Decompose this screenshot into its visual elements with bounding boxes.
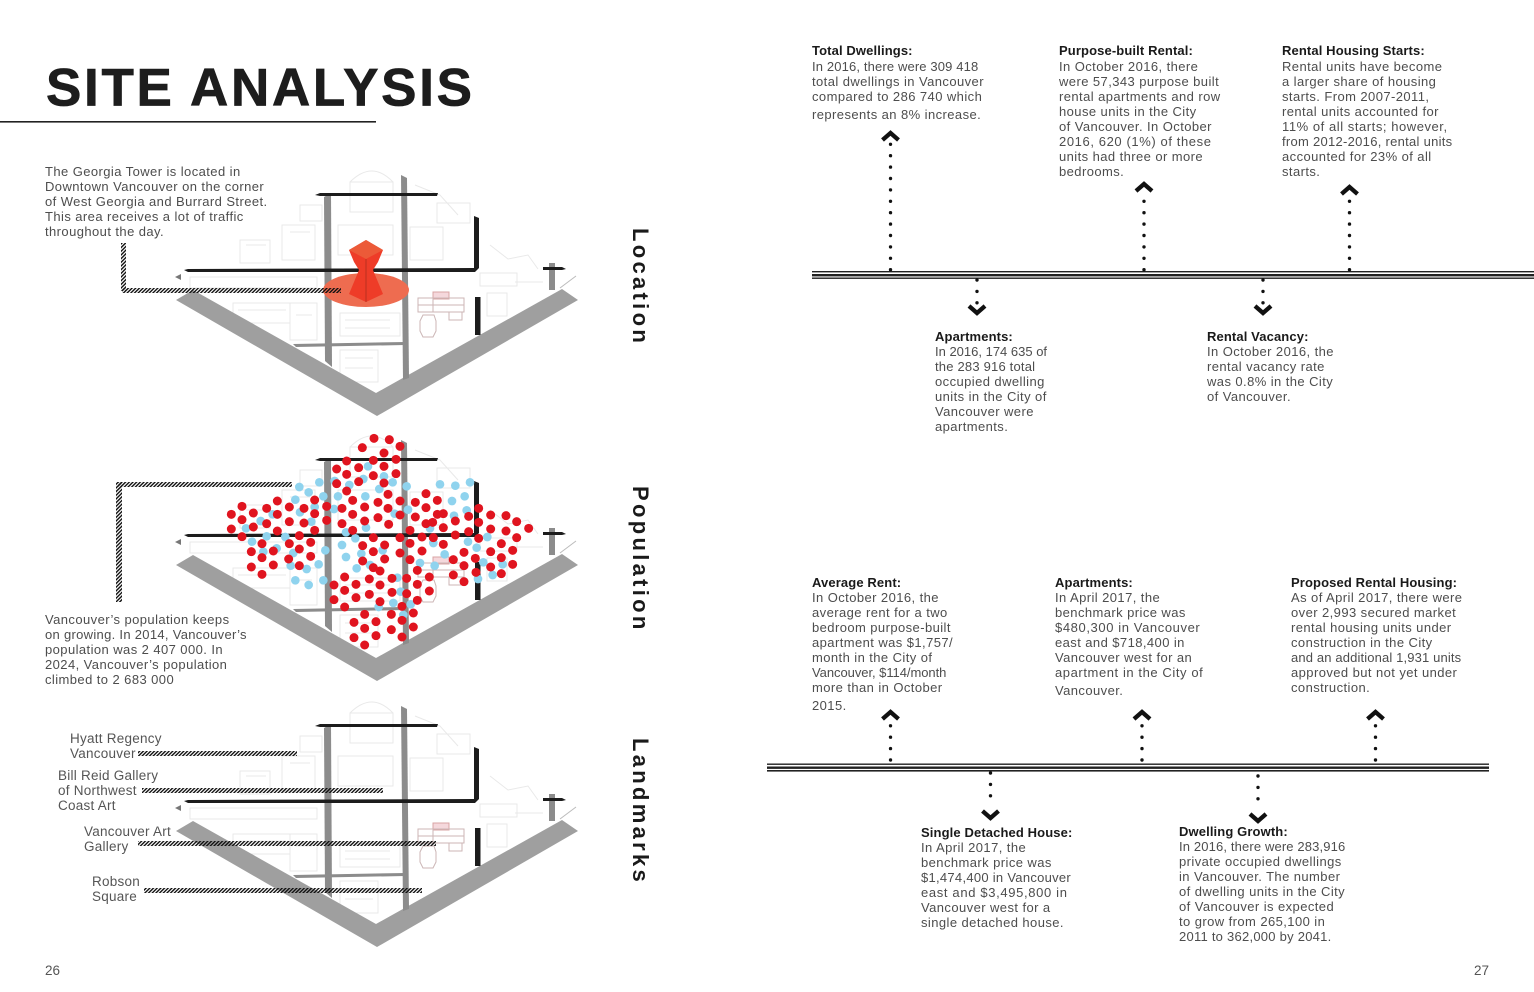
landmark label: Vancouver Art Gallery: Gallery — [84, 839, 129, 854]
text block: Proposed Rental Housing: rental housing units under — [1291, 620, 1452, 635]
text block: Proposed Rental Housing: and an additional 1,931 units — [1291, 650, 1462, 665]
text block: Purpose-built Rental: Purpose-built Rental: — [1059, 43, 1193, 58]
text block: Rental Housing Starts: a larger share of housing — [1282, 74, 1436, 89]
arrow down: Apartments — [969, 280, 985, 313]
arrow down: Single Detached House — [982, 773, 998, 818]
text block: Single Detached House: single detached house. — [921, 915, 1064, 930]
landmark label: Hyatt Regency Vancouver: Vancouver — [70, 746, 136, 761]
arrow up: Purpose-built Rental — [1136, 184, 1152, 270]
text block: Dwelling Growth: in Vancouver. The number — [1179, 869, 1341, 884]
title: SITE ANALYSIS — [46, 58, 472, 118]
landmark pointer lines — [138, 751, 436, 893]
text block: Rental Vacancy: Rental Vacancy: — [1207, 329, 1309, 344]
landmark label: Bill Reid Gallery: Bill Reid Gallery — [58, 768, 158, 783]
landmark label: Bill Reid Gallery: Coast Art — [58, 798, 116, 813]
text block: location description: throughout the day. — [45, 224, 164, 239]
section label: Landmarks: Landmarks — [628, 738, 653, 885]
text block: location description: Downtown Vancouver on the corner — [45, 179, 264, 194]
timeline rail — [812, 271, 1534, 279]
text block: Single Detached House: Vancouver west for a — [921, 900, 1051, 915]
text block: Dwelling Growth: of Vancouver is expected — [1179, 899, 1334, 914]
landmark label: Robson Square: Robson — [92, 874, 140, 889]
map: location — [121, 171, 578, 416]
map: landmarks — [138, 702, 578, 947]
text block: Apartments 2016: occupied dwelling — [935, 374, 1045, 389]
text block: Average Rent: In October 2016, the — [812, 590, 939, 605]
text block: Dwelling Growth: Dwelling Growth: — [1179, 824, 1288, 839]
text block: Average Rent: bedroom purpose-built — [812, 620, 951, 635]
text block: Total Dwellings: compared to 286 740 which — [812, 89, 982, 104]
text block: Single Detached House: east and $3,495,800 in — [921, 885, 1068, 900]
icon: tower marker — [323, 240, 409, 307]
text block: Apartments 2016: Apartments: — [935, 329, 1013, 344]
text block: location description: The Georgia Tower is located in — [45, 164, 241, 179]
text block: Proposed Rental Housing: approved but not yet under — [1291, 665, 1458, 680]
text block: Average Rent: average rent for a two — [812, 605, 948, 620]
text block: Dwelling Growth: In 2016, there were 283,916 — [1179, 839, 1345, 854]
text block: Dwelling Growth: private occupied dwellings — [1179, 854, 1342, 869]
callout leader: hatch line — [116, 482, 292, 602]
text block: Proposed Rental Housing: construction. — [1291, 680, 1370, 695]
text block: Apartments 2017: Vancouver west for an — [1055, 650, 1192, 665]
arrow up: Apartments — [1134, 712, 1150, 760]
text block: Proposed Rental Housing: construction in the City — [1291, 635, 1433, 650]
text block: Rental Vacancy: In October 2016, the — [1207, 344, 1334, 359]
text block: Purpose-built Rental: house units in the City — [1059, 104, 1197, 119]
text block: Rental Vacancy: was 0.8% in the City — [1206, 374, 1333, 389]
text block: population description: climbed to 2 683 000 — [45, 672, 174, 687]
text block: population description: population was 2 407 000. In — [45, 642, 223, 657]
page number 27: 27 — [1474, 963, 1489, 978]
callout leader: hatch line — [121, 243, 341, 293]
text block: Total Dwellings: represents an 8% increase. — [812, 107, 981, 122]
arrow down: Rental Vacancy — [1255, 280, 1271, 313]
text block: Proposed Rental Housing: Proposed Rental Housing: — [1291, 575, 1457, 590]
map: population — [116, 434, 578, 681]
text block: Apartments 2017: In April 2017, the — [1055, 590, 1160, 605]
text block: Apartments 2017: Apartments: — [1055, 575, 1133, 590]
landmark label: Robson Square: Square — [92, 889, 137, 904]
text block: Apartments 2016: apartments. — [935, 419, 1008, 434]
text block: Purpose-built Rental: bedrooms. — [1059, 164, 1124, 179]
text block: Apartments 2017: $480,300 in Vancouver — [1055, 620, 1200, 635]
text block: Proposed Rental Housing: over 2,993 secured market — [1291, 605, 1456, 620]
text block: Single Detached House: Single Detached House: — [921, 825, 1072, 840]
text block: Apartments 2016: Vancouver were — [935, 404, 1034, 419]
text block: Rental Housing Starts: 11% of all starts; however, — [1282, 119, 1448, 134]
text block: Rental Housing Starts: from 2012-2016, rental units — [1282, 134, 1453, 149]
text block: Dwelling Growth: to grow from 265,100 in — [1179, 914, 1325, 929]
timeline 2 — [767, 712, 1489, 821]
section label: Location: Location — [628, 228, 653, 346]
text block: Total Dwellings: total dwellings in Vancouver — [812, 74, 984, 89]
section label: Population: Population — [628, 486, 653, 633]
arrow up: Proposed Rental Housing — [1368, 712, 1384, 760]
timeline 1 — [812, 133, 1534, 313]
text block: Single Detached House: In April 2017, the — [921, 840, 1026, 855]
arrow up: Rental Housing Starts — [1342, 187, 1358, 270]
blue dots — [242, 462, 507, 619]
text block: Purpose-built Rental: 2016, 620 (1%) of these — [1059, 134, 1212, 149]
text block: location description: of West Georgia and Burrard Street. — [45, 194, 268, 209]
text block: Apartments 2016: units in the City of — [935, 389, 1047, 404]
timeline rail — [767, 764, 1489, 772]
arrow down: Dwelling Growth — [1250, 776, 1266, 821]
text block: Purpose-built Rental: units had three or more — [1059, 149, 1203, 164]
text block: location description: This area receives a lot of traffic — [45, 209, 244, 224]
text block: Apartments 2017: apartment in the City of — [1055, 665, 1203, 680]
landmark label: Vancouver Art Gallery: Vancouver Art — [84, 824, 171, 839]
text block: Purpose-built Rental: rental apartments and row — [1059, 89, 1221, 104]
text block: Average Rent: month in the City of — [812, 650, 932, 665]
text block: Apartments 2017: Vancouver. — [1055, 683, 1123, 698]
text block: Total Dwellings: In 2016, there were 309 418 — [812, 59, 978, 74]
text block: Average Rent: 2015. — [812, 698, 847, 713]
text block: Rental Housing Starts: starts. From 2007-2011, — [1282, 89, 1429, 104]
page number 26: 26 — [45, 963, 60, 978]
arrow up: Average Rent — [882, 712, 898, 760]
text block: Rental Vacancy: of Vancouver. — [1207, 389, 1291, 404]
red dots — [227, 434, 533, 649]
text block: Purpose-built Rental: were 57,343 purpose built — [1058, 74, 1219, 89]
text block: Purpose-built Rental: In October 2016, there — [1059, 59, 1198, 74]
text block: Rental Housing Starts: Rental Housing Starts: — [1282, 43, 1425, 58]
text block: Single Detached House: benchmark price was — [921, 855, 1052, 870]
text block: Total Dwellings: Total Dwellings: — [812, 43, 913, 58]
arrow up: Total Dwellings — [882, 133, 898, 270]
text block: Rental Housing Starts: accounted for 23% of all — [1282, 149, 1432, 164]
landmark label: Bill Reid Gallery: of Northwest — [58, 783, 137, 798]
text block: Purpose-built Rental: of Vancouver. In October — [1059, 119, 1212, 134]
text block: Average Rent: apartment was $1,757/ — [812, 635, 953, 650]
text block: Rental Housing Starts: Rental units have become — [1282, 59, 1442, 74]
text block: Average Rent: more than in October — [812, 680, 943, 695]
text block: Average Rent: Vancouver, $114/month — [812, 665, 946, 680]
text block: Apartments 2016: the 283 916 total — [935, 359, 1035, 374]
text block: population description: 2024, Vancouver’s population — [45, 657, 227, 672]
text block: population description: Vancouver’s population keeps — [45, 612, 230, 627]
text block: Dwelling Growth: 2011 to 362,000 by 2041. — [1179, 929, 1332, 944]
text block: Proposed Rental Housing: As of April 2017, there were — [1291, 590, 1462, 605]
text block: Rental Housing Starts: rental units accounted for — [1282, 104, 1439, 119]
text block: Average Rent: Average Rent: — [812, 575, 901, 590]
text block: Apartments 2017: benchmark price was — [1055, 605, 1186, 620]
text block: population description: on growing. In 2014, Vancouver’s — [45, 627, 247, 642]
text block: Single Detached House: $1,474,400 in Vancouver — [921, 870, 1071, 885]
text block: Dwelling Growth: of dwelling units in the City — [1179, 884, 1345, 899]
text block: Rental Vacancy: rental vacancy rate — [1207, 359, 1325, 374]
text block: Rental Housing Starts: starts. — [1282, 164, 1320, 179]
text block: Apartments 2016: In 2016, 174 635 of — [935, 344, 1047, 359]
landmark label: Hyatt Regency Vancouver: Hyatt Regency — [70, 731, 162, 746]
text block: Apartments 2017: east and $718,400 in — [1055, 635, 1185, 650]
population dots — [227, 434, 533, 649]
